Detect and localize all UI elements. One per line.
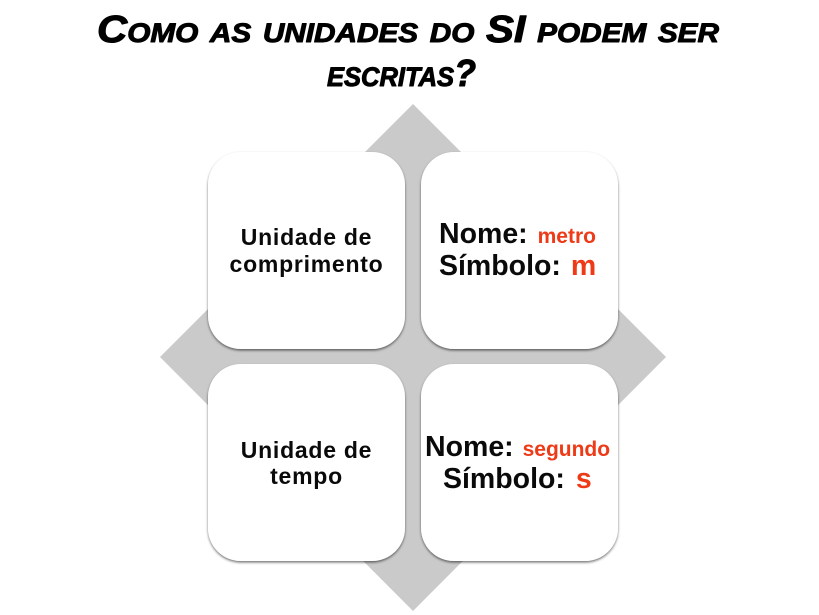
panel: unidade de tempo: Unidade de <box>241 437 372 463</box>
title: escritas? <box>327 53 476 95</box>
title <box>97 9 720 95</box>
panel: segundo: Símbolo: s <box>443 463 592 495</box>
panel: segundo: Nome: segundo <box>425 431 610 463</box>
title: Como as unidades do SI podem ser <box>97 9 720 51</box>
panel: metro: Nome: metro <box>439 218 596 250</box>
panel: unidade de tempo: tempo <box>270 463 343 489</box>
panel: unidade de comprimento: comprimento <box>230 251 383 277</box>
panel: unidade de comprimento: Unidade de <box>241 224 372 250</box>
panel: unidade de comprimento <box>208 152 405 349</box>
panel: segundo <box>421 364 618 561</box>
panel: unidade de tempo <box>208 364 405 561</box>
panel: metro <box>421 152 618 349</box>
panel: metro: Símbolo: m <box>439 250 596 282</box>
diamond arrows background <box>160 104 666 611</box>
